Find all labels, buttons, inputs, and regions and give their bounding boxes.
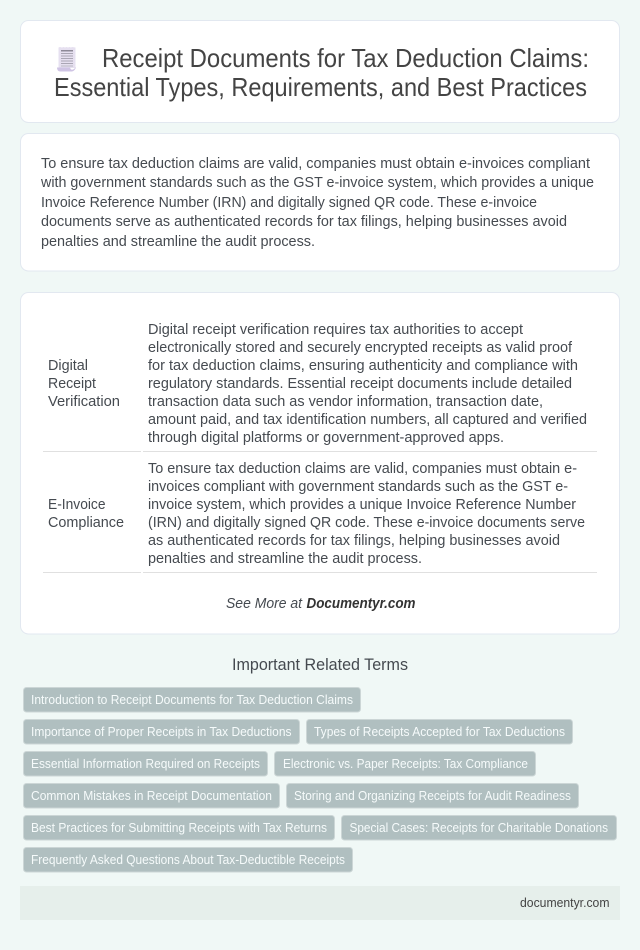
chip: Essential Information Required on Receipts <box>31 757 260 771</box>
description: digital receipt verification: transaction data such as vendor information, transaction date, <box>148 394 543 410</box>
see more link: Documentyr.com <box>306 596 416 612</box>
chip: Types of Receipts Accepted for Tax Deductions <box>314 725 565 739</box>
intro text: documents serve as authenticated records for tax filings, helping businesses avoid <box>41 214 567 230</box>
chip <box>24 816 334 840</box>
description: digital receipt verification: for tax deduction claims, ensuring authenticity and compliance with <box>148 358 578 374</box>
intro text: with government standards such as the GST e-invoice system, which provides a unique <box>40 175 594 191</box>
chip <box>24 752 268 776</box>
chip: Introduction to Receipt Documents for Tax Deduction Claims <box>31 693 353 707</box>
table row: e-invoice compliance <box>48 461 585 567</box>
title line 2: Essential Types, Requirements, and Best Practices <box>54 72 587 102</box>
footer bar: documentyr.com <box>520 895 610 910</box>
label: e-invoice compliance <box>48 497 124 531</box>
description: e-invoice compliance: invoice system, which provides a unique Invoice Reference Number <box>148 497 576 513</box>
description: digital receipt verification: amount paid, and tax identification numbers, all captured and verified <box>148 412 587 428</box>
intro text: To ensure tax deduction claims are valid, companies must obtain e-invoices compliant <box>41 156 590 172</box>
description: e-invoice compliance <box>148 461 585 567</box>
chip <box>24 688 360 712</box>
chip: Best Practices for Submitting Receipts with Tax Returns <box>31 821 327 835</box>
panel: related term chips <box>24 688 616 872</box>
see more link: See More at <box>226 596 303 612</box>
chip: Special Cases: Receipts for Charitable Donations <box>350 821 608 835</box>
label: digital receipt verification: Digital <box>48 358 88 374</box>
chip <box>274 752 536 776</box>
chip: Frequently Asked Questions About Tax-Deductible Receipts <box>31 853 345 867</box>
description: e-invoice compliance: To ensure tax deduction claims are valid, companies must obtain e- <box>148 461 577 477</box>
chip <box>24 720 300 744</box>
description: e-invoice compliance: invoices compliant with government standards such as the GST e- <box>148 479 568 495</box>
description: e-invoice compliance: as authenticated records for tax filings, helping businesses avoid <box>148 533 560 549</box>
description: digital receipt verification: Digital receipt verification requires tax authorities to accept <box>148 322 523 338</box>
intro text <box>40 156 594 250</box>
chip: Importance of Proper Receipts in Tax Deductions <box>31 725 292 739</box>
description: digital receipt verification: through digital platforms or government-approved apps. <box>148 430 504 446</box>
chip <box>306 720 572 744</box>
description: digital receipt verification: electronically stored and securely encrypted receipts as valid proof <box>148 340 573 356</box>
chip <box>24 848 352 872</box>
panel: intro paragraph <box>20 134 620 271</box>
chip <box>24 784 280 808</box>
chip: Common Mistakes in Receipt Documentation <box>31 789 272 803</box>
label: digital receipt verification <box>48 358 120 410</box>
footer bar <box>20 886 620 920</box>
description: e-invoice compliance: penalties and streamline the audit process. <box>148 551 422 567</box>
description: digital receipt verification: regulatory standards. Essential receipt documents include detailed <box>148 376 572 392</box>
panel: title card <box>20 20 620 122</box>
label: e-invoice compliance: Compliance <box>48 515 124 531</box>
chip <box>342 816 616 840</box>
label: digital receipt verification: Verification <box>48 394 120 410</box>
see more link <box>226 596 416 612</box>
chip: Electronic vs. Paper Receipts: Tax Compliance <box>283 757 528 771</box>
intro text: penalties and streamline the audit process. <box>41 234 315 250</box>
label: e-invoice compliance: E-Invoice <box>48 497 106 513</box>
label: digital receipt verification: Receipt <box>48 376 96 392</box>
icon: receipt <box>57 47 76 72</box>
chip: Storing and Organizing Receipts for Audit Readiness <box>294 789 571 803</box>
title line 1: Receipt Documents for Tax Deduction Claims: <box>102 43 589 73</box>
chip <box>286 784 578 808</box>
description: digital receipt verification <box>148 322 587 446</box>
heading: important related terms: Important Related Terms <box>232 656 408 674</box>
description: e-invoice compliance: (IRN) and digitally signed QR code. These e-invoice documents serve <box>148 515 585 531</box>
intro text: Invoice Reference Number (IRN) and digitally signed QR code. These e-invoice <box>41 195 537 211</box>
panel: comparison table <box>20 292 620 634</box>
table row: digital receipt verification <box>48 322 587 446</box>
